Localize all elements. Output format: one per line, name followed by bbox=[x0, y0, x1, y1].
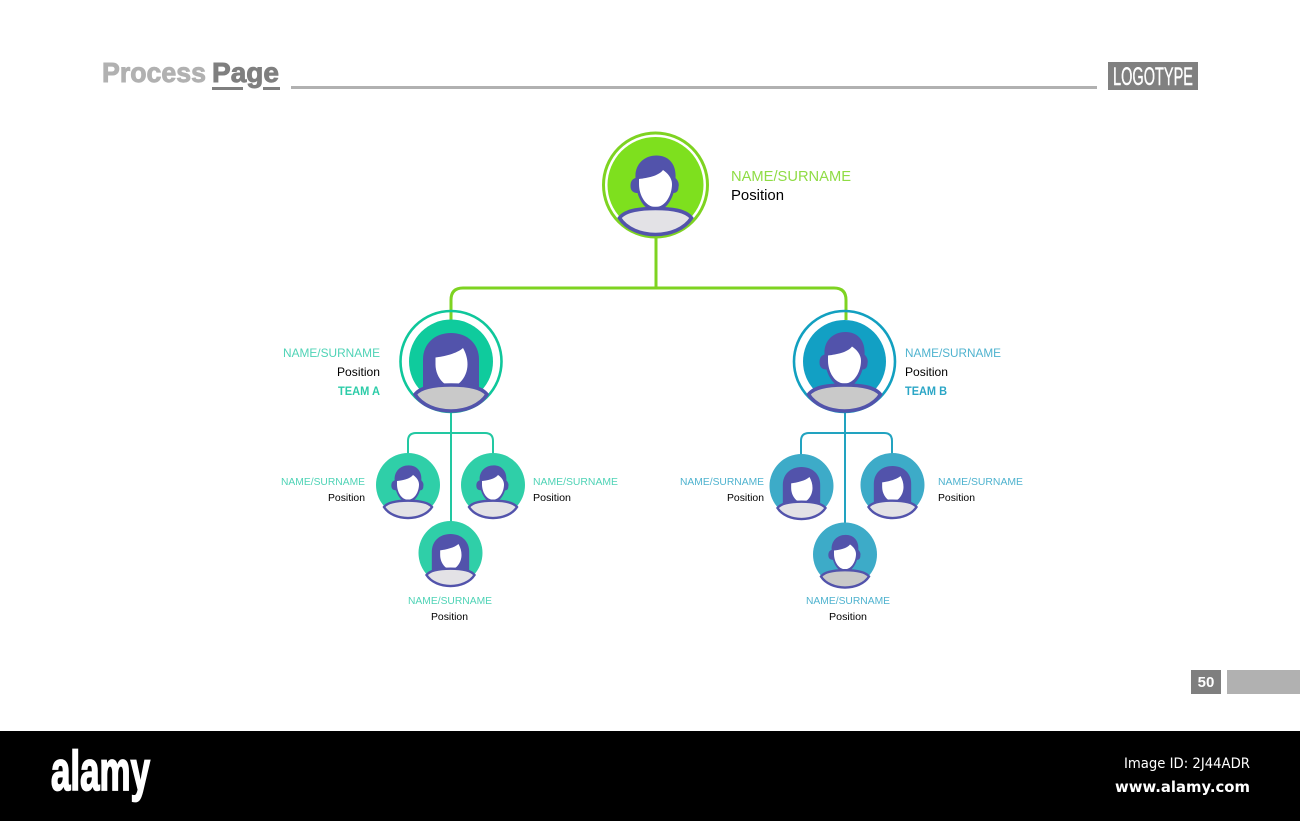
image id: Image ID: 2J44ADR bbox=[1124, 756, 1250, 772]
text: member label bbox=[680, 476, 764, 504]
footer bar bbox=[1227, 670, 1300, 694]
page number bbox=[1191, 670, 1221, 694]
text: member label bbox=[806, 595, 890, 623]
team A member bottom bbox=[408, 521, 492, 623]
text: member label bbox=[533, 476, 618, 504]
text: team A lead label: NAME/SURNAME bbox=[283, 346, 380, 360]
team A member right bbox=[461, 453, 618, 518]
text: member label bbox=[281, 476, 365, 504]
icon: avatar bbox=[418, 521, 482, 586]
text: member label: Position bbox=[431, 611, 468, 623]
header rule bbox=[291, 86, 1097, 89]
text: member label bbox=[938, 476, 1023, 504]
team B member bottom bbox=[806, 522, 890, 623]
icon: avatar bbox=[770, 454, 834, 519]
text: member label: Position bbox=[727, 492, 764, 504]
text: top manager label bbox=[731, 168, 851, 204]
logotype badge: LOGOTYPE bbox=[1113, 63, 1193, 91]
text: team A lead label: TEAM A bbox=[338, 384, 380, 398]
header bbox=[102, 57, 1198, 91]
connector: top level to team leads bbox=[451, 238, 846, 320]
icon: team A lead avatar bbox=[400, 311, 502, 412]
text: member label: NAME/SURNAME bbox=[806, 595, 890, 607]
title: Process Page: Process bbox=[102, 57, 206, 88]
text: member label: Position bbox=[533, 492, 571, 504]
alamy logo text: alamy bbox=[51, 739, 150, 802]
text: team A lead label: Position bbox=[337, 365, 380, 379]
connector: team A bbox=[408, 413, 493, 523]
top manager node bbox=[604, 133, 851, 237]
text: member label: Position bbox=[938, 492, 975, 504]
text: team B lead label: Position bbox=[905, 365, 948, 379]
icon: avatar bbox=[860, 453, 924, 518]
panel: team B bbox=[680, 311, 1023, 623]
text: team A lead label bbox=[283, 346, 380, 398]
text: member label: NAME/SURNAME bbox=[938, 476, 1023, 488]
website: www.alamy.com bbox=[1115, 778, 1250, 796]
text: top manager label: Position bbox=[731, 187, 784, 204]
text: member label: Position bbox=[829, 611, 867, 623]
text: member label: NAME/SURNAME bbox=[408, 595, 492, 607]
team B member right bbox=[860, 453, 1023, 518]
icon: avatar bbox=[813, 522, 877, 588]
title: Process Page: Page bbox=[212, 57, 279, 88]
icon: avatar bbox=[461, 453, 525, 518]
text: team B lead label bbox=[905, 346, 1001, 398]
panel: team A bbox=[281, 311, 618, 623]
icon: top manager avatar bbox=[604, 133, 708, 237]
page number: 50 bbox=[1198, 674, 1214, 691]
text: member label: NAME/SURNAME bbox=[533, 476, 618, 488]
title: Process Page bbox=[102, 57, 280, 90]
text: member label: Position bbox=[328, 492, 365, 504]
icon: team B lead avatar bbox=[794, 311, 895, 412]
text: member label: NAME/SURNAME bbox=[281, 476, 365, 488]
watermark band bbox=[0, 731, 1300, 821]
text: member label: NAME/SURNAME bbox=[680, 476, 764, 488]
text: team B lead label: TEAM B bbox=[905, 384, 947, 398]
team B member left bbox=[680, 454, 834, 519]
team A member left bbox=[281, 453, 440, 518]
icon: avatar bbox=[376, 453, 440, 518]
connector: team B bbox=[801, 413, 892, 524]
logotype badge bbox=[1108, 62, 1198, 91]
text: member label bbox=[408, 595, 492, 623]
text: top manager label: NAME/SURNAME bbox=[731, 168, 851, 185]
text: team B lead label: NAME/SURNAME bbox=[905, 346, 1001, 360]
